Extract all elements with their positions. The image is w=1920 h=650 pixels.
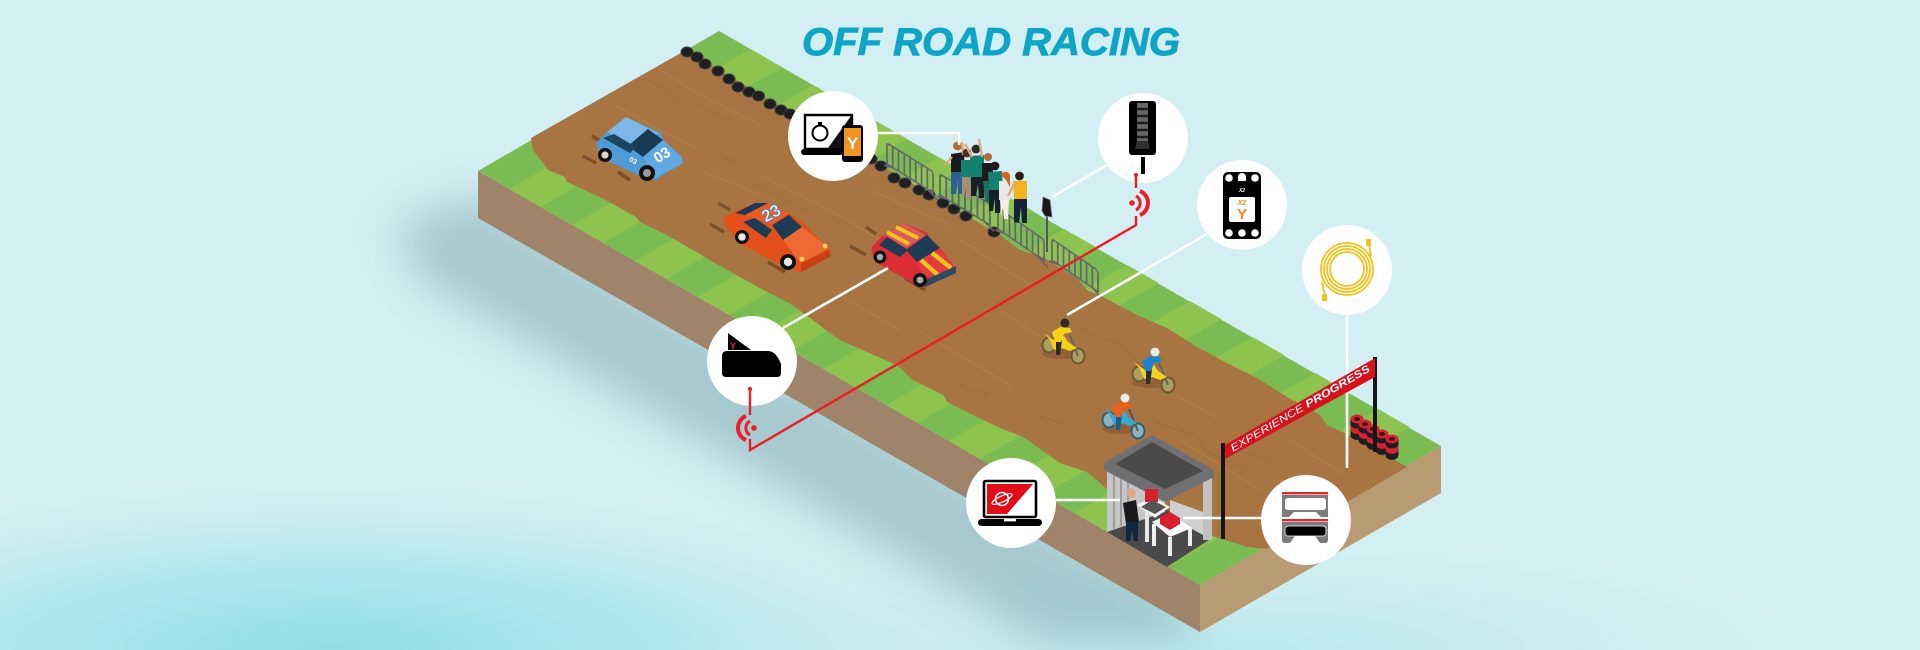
callout: trackside sensor: [1098, 93, 1188, 188]
red wireless link: [738, 191, 1148, 450]
person 7: [1008, 172, 1027, 223]
person 6: [999, 172, 1010, 219]
callout: in-car device: [707, 316, 797, 415]
callout: X2 transponder board: X2: [1238, 188, 1245, 194]
tent roof: [1104, 435, 1214, 502]
person 3: [965, 139, 984, 198]
track ruts: [644, 78, 1270, 470]
finish banner: [1221, 357, 1377, 539]
person 5: [988, 162, 1003, 213]
title: OFF ROAD RACING: [802, 21, 1180, 64]
callout: X2 transponder board: [1197, 160, 1287, 250]
dirt track: [531, 50, 1407, 549]
tent right wall: [1170, 500, 1203, 535]
timing tent: [1104, 435, 1214, 567]
grass stripes: [509, 49, 1410, 567]
motorbike: orange rider: [1102, 394, 1144, 438]
callout: base station modem: [1261, 475, 1351, 565]
grass top: [478, 31, 1441, 585]
car: orange 23: 23: [758, 201, 784, 226]
tyre barrier: [681, 47, 1000, 237]
terrain block: [478, 31, 1441, 632]
motorbike: blue rider: [1132, 348, 1174, 392]
tent floor: [1107, 505, 1212, 567]
car: blue 03: [583, 117, 683, 181]
white connector lines: [783, 133, 1347, 518]
fence barriers: [884, 141, 1102, 298]
sign post: [1042, 197, 1052, 252]
left side wall: [478, 171, 1200, 632]
table with laptop: [1137, 497, 1170, 518]
block shadow: [395, 195, 1200, 640]
callout: in-car device: Y: [730, 341, 736, 351]
red tyre stacks: [1350, 400, 1398, 460]
right side wall: [1200, 446, 1441, 632]
finish banner: EXPERIENCE PROGRESS: [1228, 363, 1372, 455]
callout: X2 transponder board: Y: [1237, 206, 1247, 223]
person 1: [944, 142, 965, 194]
table with modem: [1152, 513, 1192, 537]
car: orange 23: [710, 201, 830, 272]
operator: [1123, 488, 1139, 541]
person 2: [961, 149, 972, 199]
person 4: [982, 153, 993, 202]
tent left wall: [1107, 468, 1165, 532]
spectators: [944, 139, 1027, 223]
motorbike: yellow rider: [1042, 318, 1084, 364]
car: red with yellow stripes: [850, 223, 956, 290]
car: blue 03: 03: [651, 144, 674, 167]
car: blue 03: 03: [628, 156, 638, 166]
callout: timing software on laptop and phone: Y: [847, 134, 859, 153]
callout: race control laptop: [966, 458, 1056, 548]
callout: X2 transponder board: X2: [1237, 200, 1246, 207]
callout: timing software on laptop and phone: [788, 91, 878, 181]
callout: yellow cable coil: [1302, 225, 1392, 315]
